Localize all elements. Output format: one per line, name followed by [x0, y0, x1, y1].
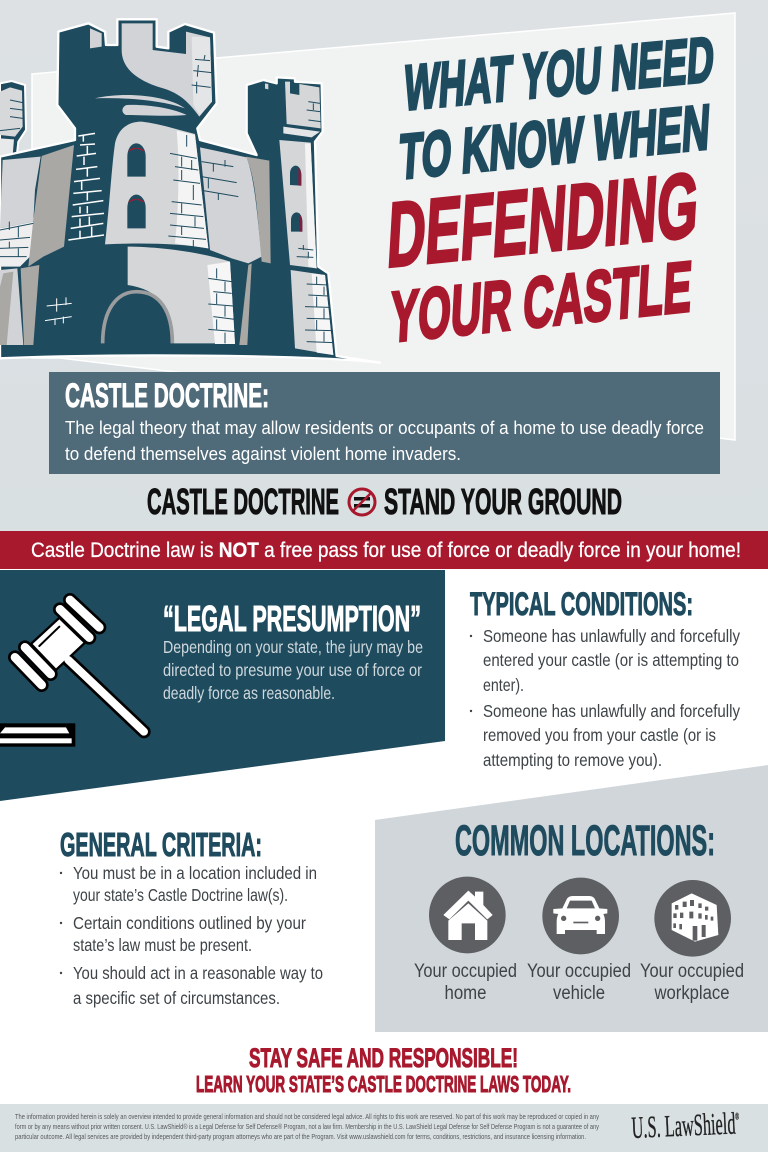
title	[385, 24, 716, 358]
legal presumption text: deadly force as reasonable.	[163, 683, 335, 703]
icon: not equal	[349, 489, 375, 515]
criteria list: You must be in a location included in	[73, 863, 317, 883]
label: vehicle: vehicle	[553, 983, 605, 1004]
label: home: home	[444, 983, 486, 1004]
label: workplace: workplace	[654, 983, 730, 1004]
logo: U.S. LawShield: ®	[735, 1111, 740, 1122]
section: general criteria	[60, 826, 323, 1008]
icon: gavel	[0, 600, 144, 747]
icon: vehicle	[542, 878, 619, 954]
label: home: Your occupied	[414, 961, 517, 982]
panel: title backdrop	[32, 13, 735, 440]
definition text: The legal theory that may allow residents or occupants of a home to use deadly force	[65, 417, 704, 438]
label: vehicle	[527, 961, 631, 1004]
castle: main tower head	[90, 23, 212, 117]
definition text	[65, 417, 704, 464]
criteria list: a specific set of circumstances.	[73, 988, 280, 1008]
panel: castle doctrine definition	[49, 372, 720, 474]
legal presumption text	[163, 637, 423, 703]
criteria list: Certain conditions outlined by your	[73, 913, 306, 933]
castle: gate base	[45, 247, 236, 344]
banner: not a free pass	[0, 531, 768, 569]
label: vehicle: Your occupied	[527, 961, 631, 982]
criteria list: state’s law must be present.	[73, 935, 252, 955]
footer	[0, 1104, 768, 1152]
label: workplace	[640, 961, 744, 1004]
conditions list: enter).	[483, 675, 524, 695]
heading: castle doctrine not equal stand your ground: CASTLE DOCTRINE	[147, 481, 339, 522]
conditions list: removed you from your castle (or is	[483, 725, 716, 745]
legal presumption text: directed to presume your use of force or	[163, 660, 422, 680]
disclaimer	[15, 1112, 599, 1141]
castle: left wall	[0, 145, 74, 345]
panel: common locations	[375, 765, 768, 1032]
heading: general criteria: GENERAL CRITERIA:	[60, 826, 262, 863]
icon: home	[429, 877, 506, 953]
label: workplace: Your occupied	[640, 961, 744, 982]
conditions list: attempting to remove you).	[483, 750, 662, 770]
disclaimer: particular outcome. All legal services are provided by independent third-party program attorneys who are part of the Program. Visit www.uslawshield.com for terms, conditions, restrictions, and insurance licensing information.	[15, 1132, 586, 1141]
castle: tower brick column	[68, 133, 104, 240]
call to action: STAY SAFE AND RESPONSIBLE!	[249, 1043, 518, 1073]
castle: central tower body	[105, 122, 208, 248]
castle: main silhouette	[0, 19, 380, 363]
heading: legal presumption: “LEGAL PRESUMPTION”	[163, 598, 421, 639]
legal presumption text: Depending on your state, the jury may be	[163, 637, 423, 657]
icon: workplace	[654, 880, 731, 957]
label: home	[414, 961, 517, 1004]
criteria list: your state’s Castle Doctrine law(s).	[73, 885, 288, 905]
illustration: castle	[0, 19, 380, 363]
call to action	[196, 1043, 571, 1097]
criteria list	[60, 863, 323, 1008]
panel: legal presumption	[0, 570, 445, 801]
heading: castle doctrine: CASTLE DOCTRINE:	[65, 377, 269, 415]
castle: right tower	[265, 82, 333, 355]
disclaimer: The information provided herein is solely an overview intended to provide general information and should not be considered legal advice. All rights to this work are reserved. No part of this work may be reproduced or copied in any	[15, 1112, 599, 1121]
conditions list	[470, 626, 740, 770]
definition text: to defend themselves against violent home invaders.	[65, 443, 461, 464]
disclaimer: form or by any means without prior written consent. U.S. LawShield® is a Legal Defense for Self Defense® Program, not a law firm. Membership in the U.S. LawShield Legal Defense for Self Defense Program is not a guarantee of any	[15, 1122, 599, 1131]
castle: right wall	[200, 147, 271, 345]
criteria list: You should act in a reasonable way to	[73, 963, 323, 983]
castle: left tower	[0, 81, 26, 160]
section: typical conditions	[470, 586, 740, 770]
